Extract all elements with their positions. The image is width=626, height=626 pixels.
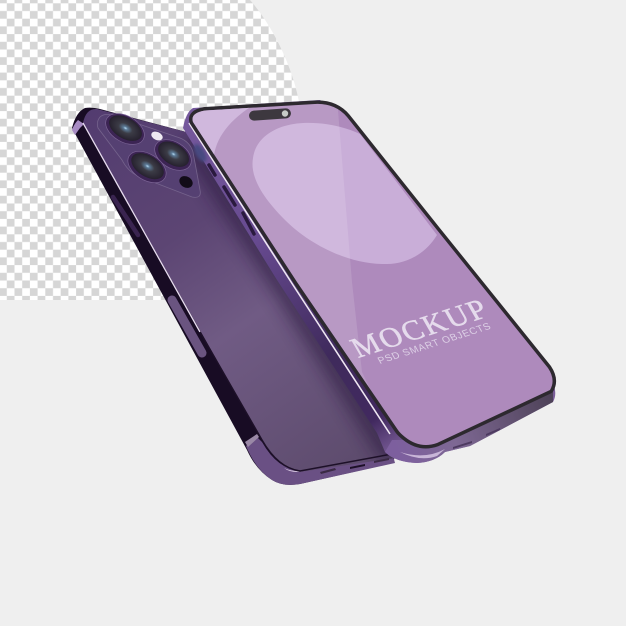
front phone lower band: [385, 385, 553, 463]
back phone lower edge line: [200, 332, 392, 471]
volume up: [224, 187, 235, 205]
front camera dot: [282, 110, 288, 117]
screen: [192, 104, 553, 445]
bezel: [192, 104, 553, 445]
corner light shape: [192, 108, 250, 154]
underside ports: [453, 428, 500, 449]
camera reflection on frame: [191, 142, 209, 164]
mute switch: [209, 165, 215, 175]
mockup illustration: [0, 0, 556, 485]
back phone top-left frame: [72, 120, 84, 135]
back phone bottom frame: [246, 436, 395, 485]
mockup title: MOCKUP: [345, 293, 493, 364]
lidar sensor: [177, 174, 195, 190]
back phone corner highlight: [284, 468, 305, 472]
flash: [150, 130, 164, 142]
mockup subtitle: PSD SMART OBJECTS: [376, 321, 493, 367]
bottom speaker ports: [320, 458, 389, 474]
front phone frame: [183, 100, 555, 463]
screen base: [192, 104, 553, 445]
volume down: [243, 213, 254, 234]
back phone: [72, 107, 395, 485]
back phone frame band: [245, 434, 259, 447]
front phone: [180, 95, 570, 463]
lens bottom: [122, 145, 172, 189]
front phone shadow on back: [190, 140, 395, 460]
transparency checkerboard: [0, 0, 300, 300]
back phone body: [72, 108, 395, 485]
back phone face: [83, 109, 395, 472]
white edge line: [189, 123, 390, 434]
lens top: [100, 107, 150, 151]
camera plateau: [97, 114, 200, 197]
notch: [249, 108, 291, 121]
side button on back phone: [172, 300, 202, 353]
large circle: [252, 123, 437, 264]
volume button on back phone: [113, 197, 138, 235]
lens right: [149, 133, 197, 177]
underside highlight: [400, 449, 445, 458]
back phone white edge line: [83, 123, 200, 332]
diagonal gloss: [192, 104, 370, 388]
